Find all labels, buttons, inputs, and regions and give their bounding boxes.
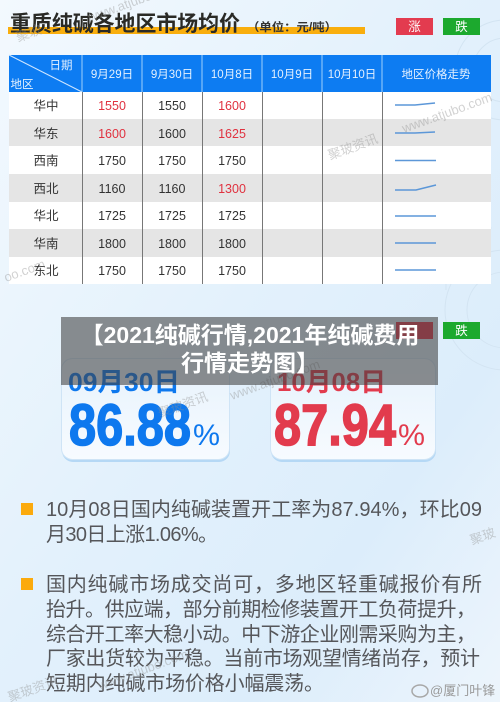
watermarks: 聚玻资讯 [156, 389, 210, 421]
card: 10月08日: 10月08日 [277, 367, 386, 397]
table rows: 1800 [98, 237, 126, 251]
table rows: 1625 [218, 127, 246, 141]
table header: 10月9日 [271, 69, 313, 81]
table rows: 1750 [158, 154, 186, 168]
table header: 地区 [10, 78, 34, 91]
watermarks: 聚玻资讯 [326, 131, 380, 163]
table rows: 1160 [99, 182, 125, 196]
table rows: 西南 [33, 153, 59, 168]
table rows: 华南 [33, 236, 59, 251]
background decorative rings [445, 20, 500, 370]
table rows: 华东 [33, 126, 59, 141]
card: 09月30日: % [193, 419, 220, 452]
table rows: 1300 [218, 182, 246, 196]
bullet paragraph 2 [21, 573, 482, 695]
table rows: 1750 [98, 264, 126, 278]
table rows: 1750 [218, 264, 246, 278]
table rows: 1800 [158, 237, 186, 251]
watermarks: www.atjubo.com [227, 356, 322, 403]
legend: rise and fall: 跌 [455, 19, 468, 34]
card: 09月30日: 86.88 [69, 393, 191, 458]
title banner overlay: 【2021纯碱行情,2021年纯碱费用 [81, 322, 419, 348]
watermarks: www.atjubo.com [399, 89, 494, 136]
table rows: 1550 [158, 99, 186, 113]
table rows: 1725 [98, 209, 126, 223]
title banner overlay [61, 317, 438, 385]
legend repeat behind banner [396, 322, 480, 339]
table header [9, 55, 491, 92]
bullet paragraph 2: 综合开工率大稳小动。中下游企业刚需采购为主， [46, 623, 476, 646]
legend: rise and fall: 涨 [408, 19, 421, 34]
title heading: 重质纯碱各地区市场均价 [10, 11, 240, 36]
bullet paragraph 2: 国内纯碱市场成交尚可，多地区轻重碱报价有所 [46, 573, 482, 596]
watermarks: oo.com [2, 256, 47, 285]
bullet paragraph 1 [21, 498, 482, 546]
legend repeat behind banner: 跌 [455, 323, 468, 338]
table rows: 1800 [218, 237, 246, 251]
table rows: 1600 [218, 99, 246, 113]
bullet paragraph 2: 短期内纯碱市场价格小幅震荡。 [46, 672, 324, 695]
table rows: 1750 [218, 154, 246, 168]
table rows: 1725 [218, 209, 246, 223]
legend: rise and fall [396, 18, 480, 35]
weibo attribution: @厦门叶锋 [430, 683, 495, 698]
table rows: 1750 [158, 264, 186, 278]
table rows: 1160 [159, 182, 185, 196]
table rows: 1725 [158, 209, 186, 223]
table rows: 1600 [98, 127, 126, 141]
table header: 10月8日 [211, 69, 253, 81]
table header: 地区价格走势 [402, 67, 471, 81]
card: 09月30日 [62, 358, 230, 462]
table rows: 华中 [33, 98, 59, 113]
card: 10月08日 [270, 358, 436, 462]
table header: 9月30日 [151, 69, 193, 81]
table rows: 1600 [158, 127, 186, 141]
table rows: 1750 [98, 154, 126, 168]
table rows [9, 92, 491, 284]
table header: 10月10日 [328, 69, 376, 81]
card: 10月08日: 87.94 [274, 393, 396, 458]
price table [9, 55, 491, 284]
regional price sparklines [395, 103, 436, 270]
title heading: （单位：元/吨） [247, 20, 337, 34]
table rows: 华北 [33, 208, 59, 223]
bullet paragraph 2: 抬升。供应端，部分前期检修装置开工负荷提升， [46, 598, 476, 621]
card: 10月08日: % [398, 419, 425, 452]
table rows: 西北 [33, 182, 59, 196]
table rows: 1550 [98, 99, 126, 113]
bullet paragraph 1: 10月08日国内纯碱装置开工率为87.94%，环比09 [46, 498, 482, 521]
watermarks: 聚玻 [468, 525, 497, 548]
watermarks: www.atjubo.com [95, 646, 190, 693]
table header: 9月29日 [91, 69, 133, 81]
card: 09月30日: 09月30日 [68, 367, 180, 397]
bullet paragraph 1: 月30日上涨1.06%。 [46, 523, 218, 546]
table rows: 东北 [33, 264, 59, 278]
bullet paragraph 2: 厂家出货较为平稳。当前市场观望情绪尚存，预计 [46, 647, 480, 670]
table header: 日期 [50, 59, 72, 72]
title heading [8, 11, 365, 36]
watermarks: 聚玻 [14, 22, 43, 45]
title banner overlay: 行情走势图】 [181, 350, 319, 376]
